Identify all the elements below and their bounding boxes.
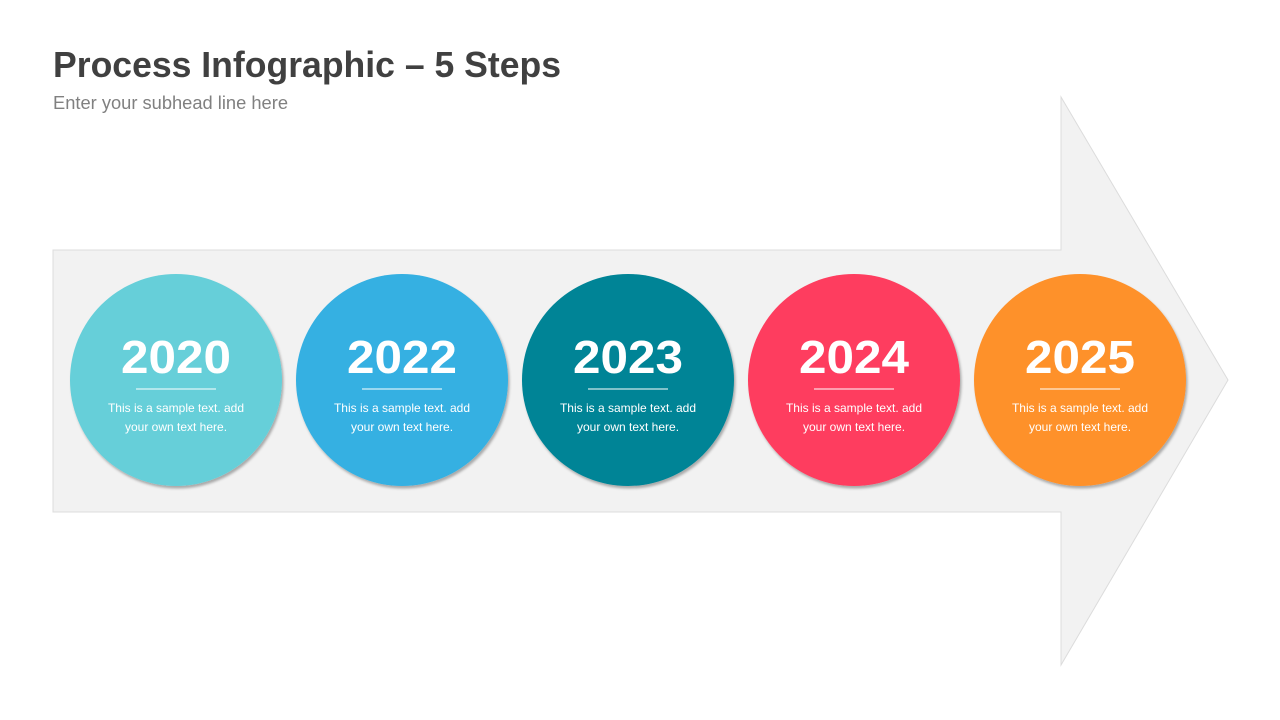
step 5: 2025: This is a sample text. add [1012, 401, 1148, 415]
step 2: 2022: 2022 [347, 331, 457, 383]
step 5: 2025: your own text here. [1029, 420, 1131, 434]
step 3: 2023: This is a sample text. add [560, 401, 696, 415]
step 5: 2025: 2025 [1025, 331, 1135, 383]
step 1: 2020 [70, 274, 282, 486]
arrow background [53, 97, 1228, 665]
step 1: 2020: your own text here. [125, 420, 227, 434]
step 2: 2022: your own text here. [351, 420, 453, 434]
step 5: 2025 [974, 274, 1186, 486]
step 3: 2023 [522, 274, 734, 486]
step 2: 2022 [296, 274, 508, 486]
step 4: 2024: 2024 [799, 331, 909, 383]
title: Process Infographic – 5 Steps [53, 44, 561, 85]
subhead: Enter your subhead line here [53, 93, 288, 113]
step 3: 2023: your own text here. [577, 420, 679, 434]
step 4: 2024: This is a sample text. add [786, 401, 922, 415]
step 3: 2023: 2023 [573, 331, 683, 383]
step 1: 2020: This is a sample text. add [108, 401, 244, 415]
step 4: 2024: your own text here. [803, 420, 905, 434]
step 4: 2024 [748, 274, 960, 486]
step 1: 2020: 2020 [121, 331, 231, 383]
step 2: 2022: This is a sample text. add [334, 401, 470, 415]
